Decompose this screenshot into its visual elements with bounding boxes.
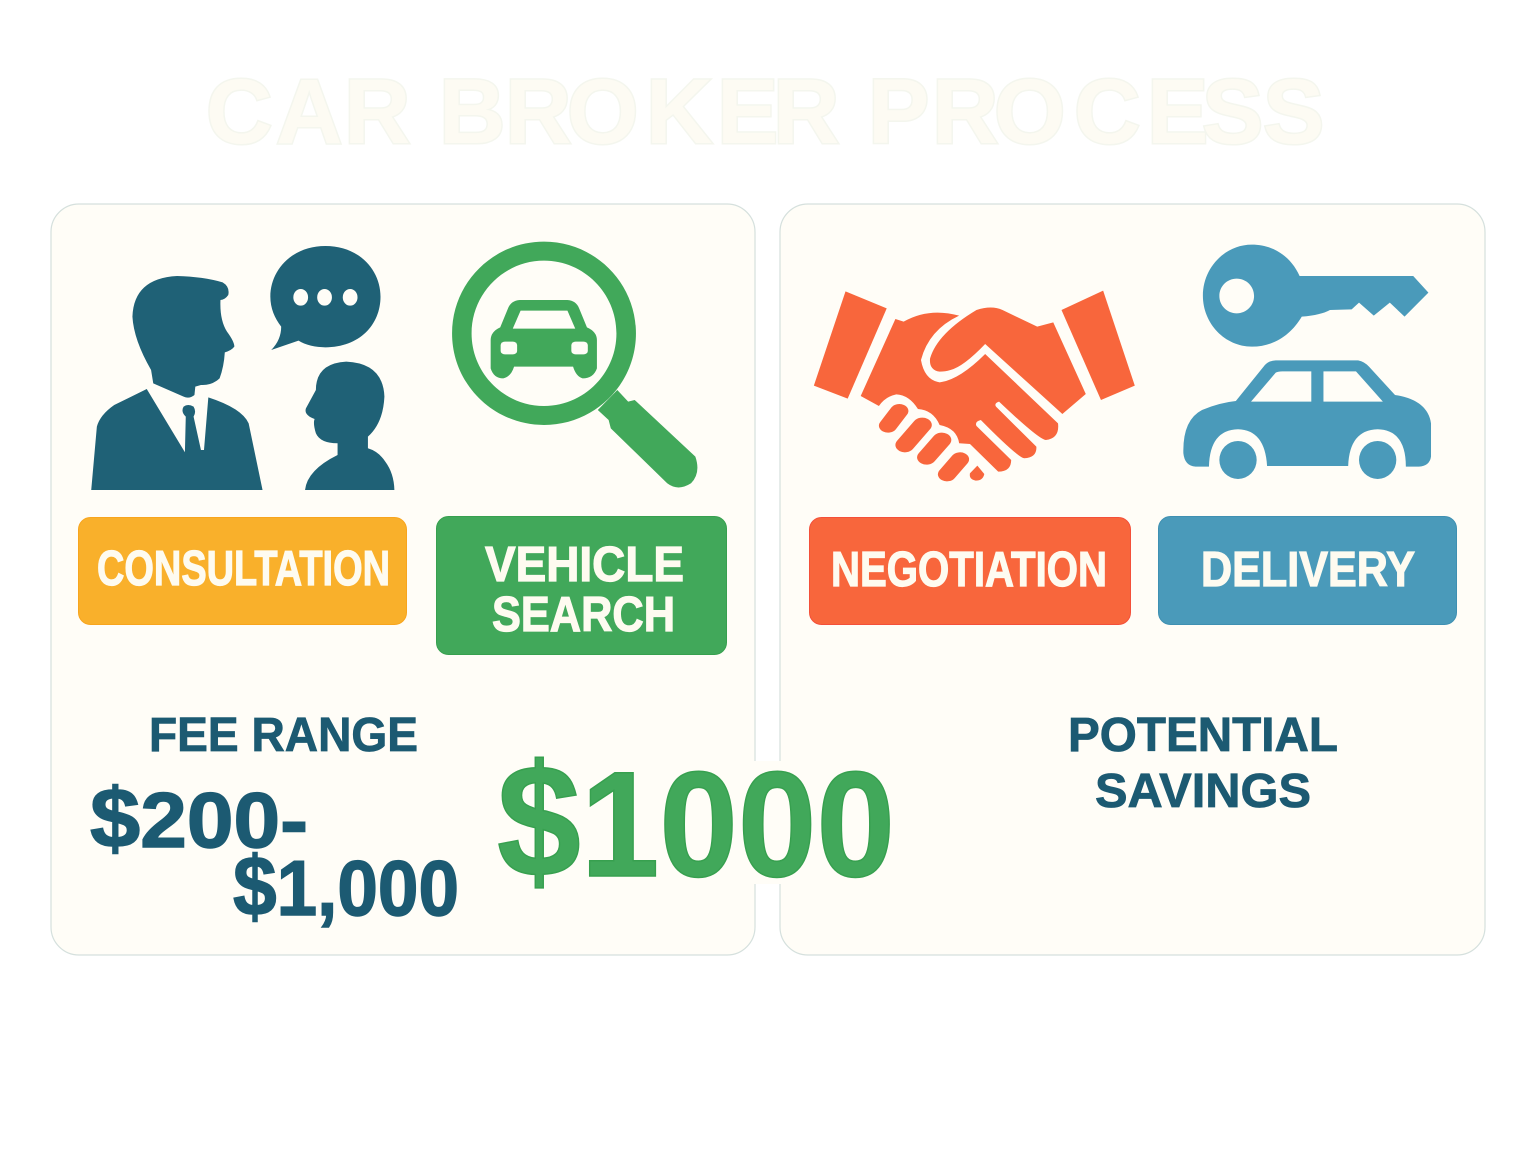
panel background: left: [51, 204, 755, 955]
fee amount: $200 to $1,000: [90, 771, 459, 933]
icon: car key and car: [1183, 245, 1431, 479]
heading: potential savings: POTENTIAL: [1068, 709, 1338, 762]
panel: fee range: [51, 204, 755, 955]
heading: fee range: FEE RANGE: [149, 709, 418, 762]
label: vehicle search: VEHICLE: [485, 538, 684, 592]
label: consultation: CONSULTATION: [97, 542, 390, 596]
label: negotiation: [810, 518, 1130, 624]
icon: handshake: [814, 291, 1135, 481]
label: vehicle search: SEARCH: [492, 588, 675, 642]
label: delivery: [1158, 516, 1456, 624]
fee amount: $200 to $1,000: $200-: [90, 771, 308, 865]
icon: consultation people with speech bubble: [91, 246, 394, 490]
callout: $1000 savings figure: $1000: [497, 731, 895, 910]
label: negotiation: NEGOTIATION: [831, 543, 1107, 597]
title: CAR BROKER PROCESS: [206, 61, 1324, 163]
heading: potential savings: [1068, 709, 1338, 818]
icon: magnifying glass over car: [452, 242, 697, 487]
panel background: right: [780, 204, 1485, 955]
label: vehicle search: [436, 516, 726, 654]
label: delivery: DELIVERY: [1201, 543, 1415, 597]
fee amount: $200 to $1,000: $1,000: [233, 839, 459, 933]
label: consultation: [78, 518, 406, 624]
panel: potential savings: [780, 204, 1485, 955]
heading: potential savings: SAVINGS: [1095, 765, 1311, 818]
